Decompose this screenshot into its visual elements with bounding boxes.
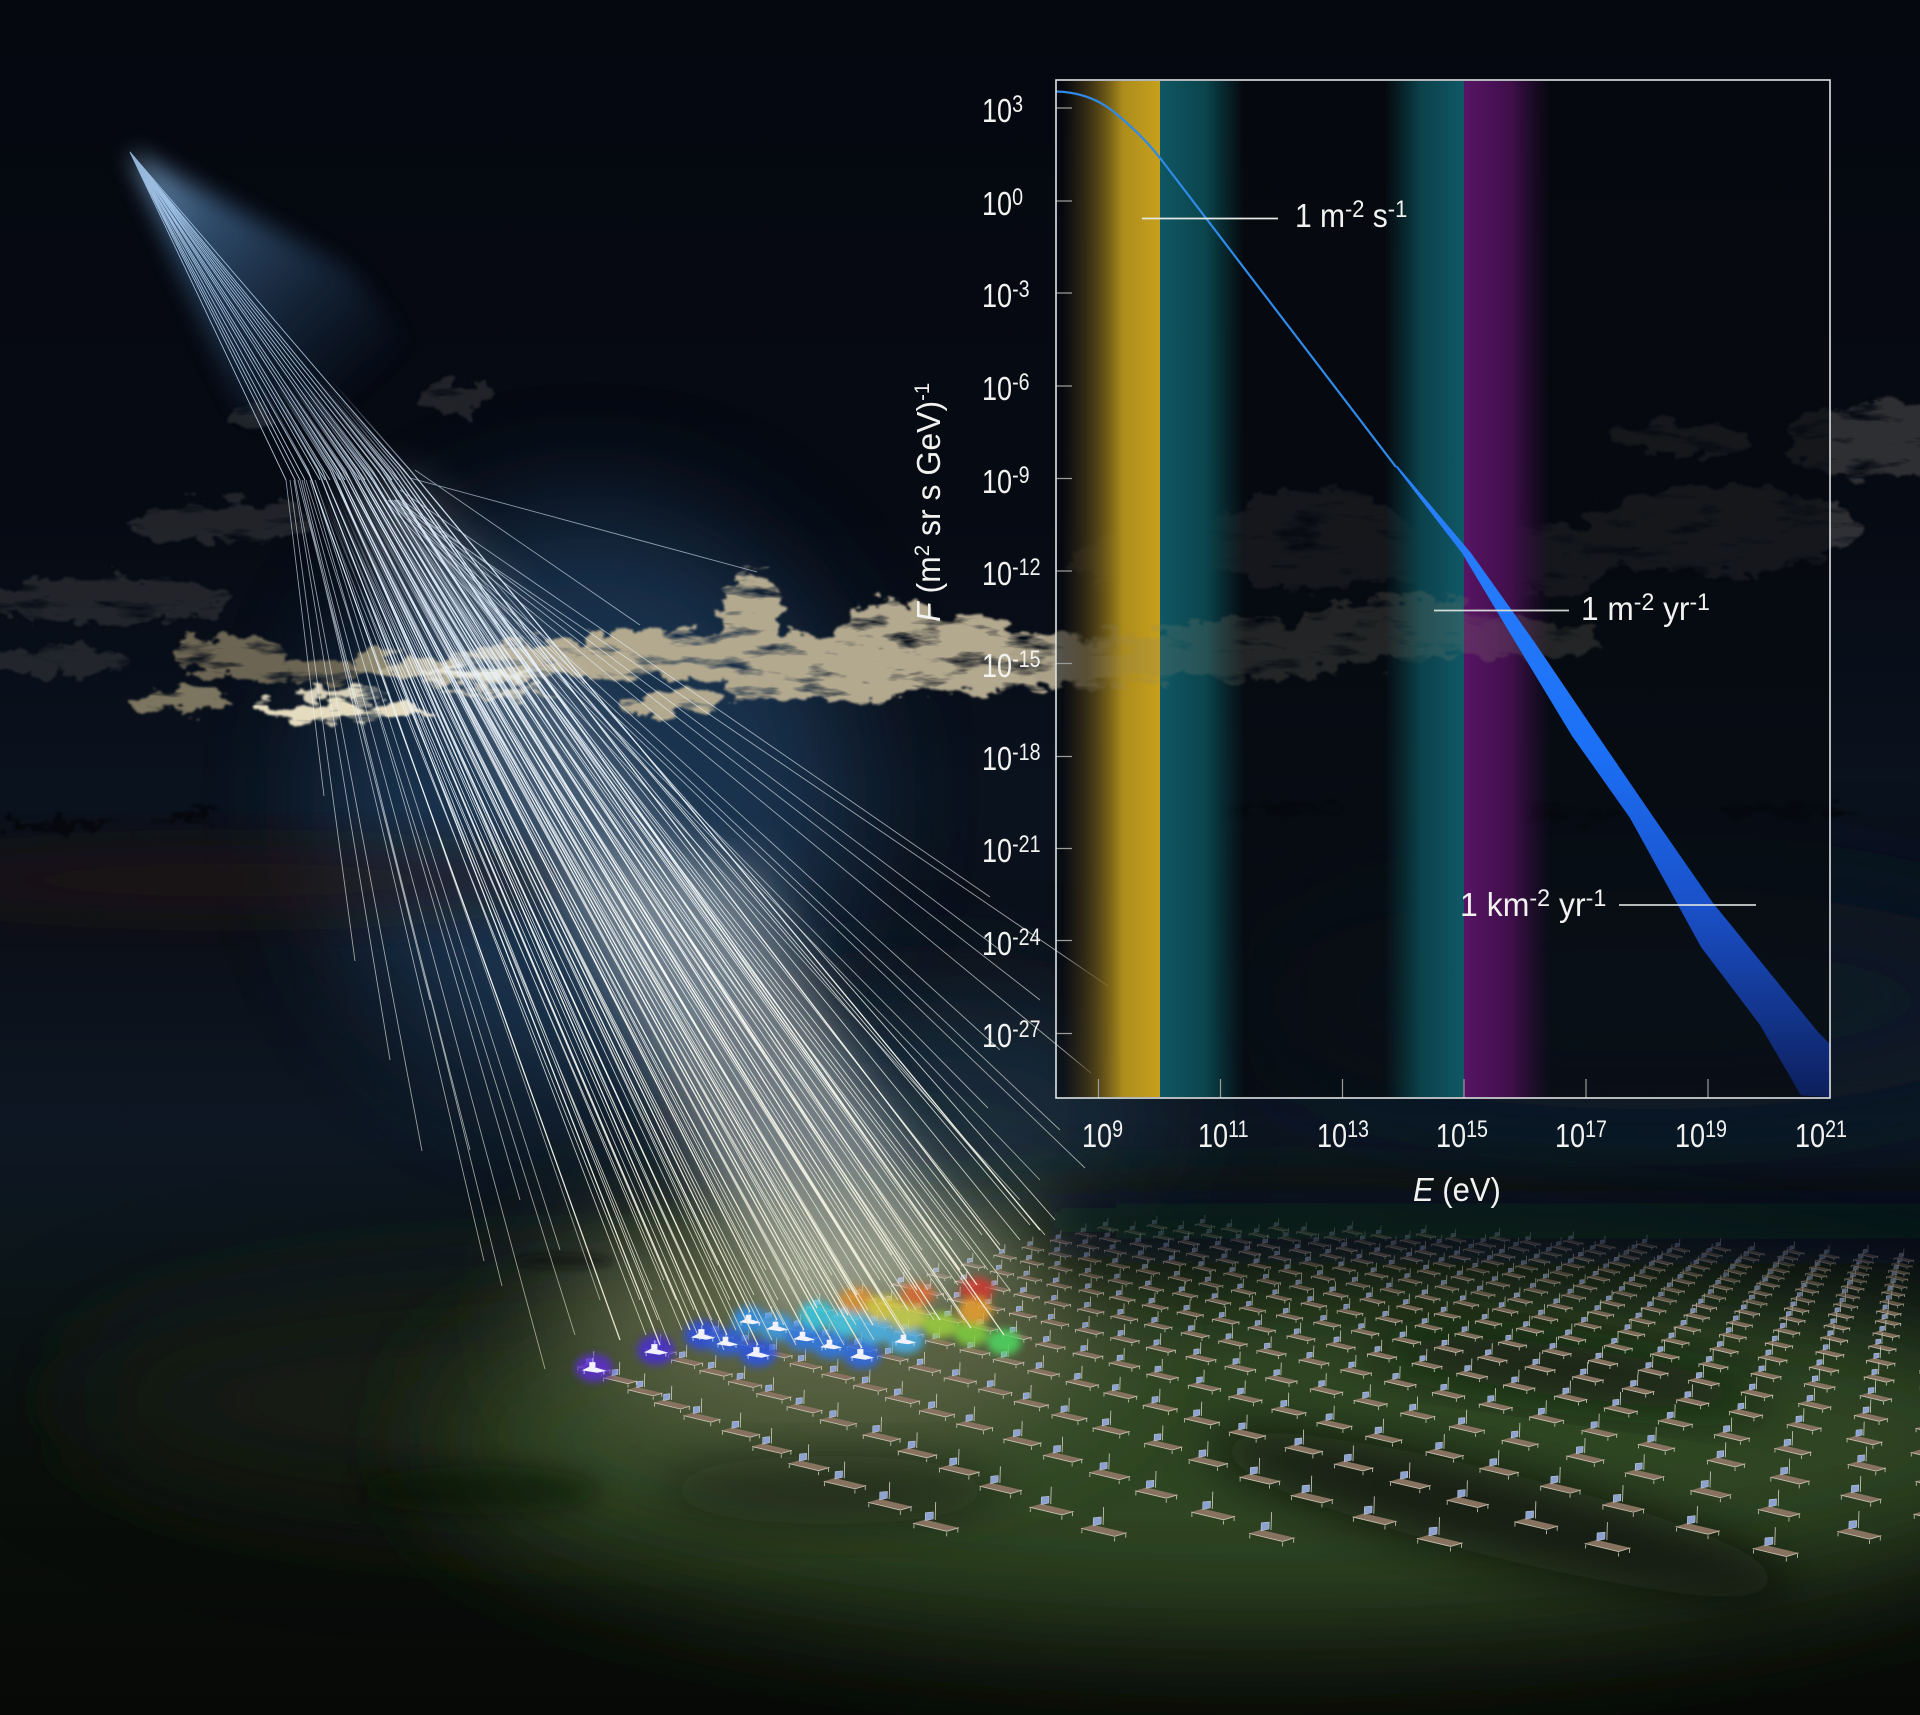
- callout: 1 per square metre per second: s: [1364, 197, 1388, 234]
- x-axis tick labels: 10: [1082, 1119, 1112, 1155]
- callout: 1 per square metre per year: [1434, 589, 1710, 627]
- y-axis title: F (m: [911, 556, 947, 622]
- y-axis tick labels: 10: [982, 187, 1012, 223]
- detector array: perspective rows of surface detectors: [577, 1214, 1920, 1602]
- chart: energy bands, flux curve and frame: [1010, 80, 1830, 1098]
- band: teal high energy: [1384, 81, 1464, 1097]
- clouds: dim distant layer: [0, 382, 1920, 829]
- y-axis tick labels: -6: [1012, 368, 1030, 395]
- x-axis tick labels: 10: [1795, 1119, 1825, 1155]
- particle shower rays: bright layer: [258, 380, 1040, 1348]
- callout: 1 per square metre per year: yr: [1654, 590, 1690, 627]
- diffuse glow of particle shower: [340, 480, 1010, 1330]
- x-axis tick labels: 9: [1112, 1115, 1123, 1142]
- band: magenta: [1464, 81, 1552, 1097]
- x-axis tick labels: 11: [1228, 1115, 1249, 1142]
- x-axis tick labels: 10: [1436, 1119, 1466, 1155]
- x-axis tick labels: [1082, 1115, 1847, 1155]
- callout: 1 per square metre per second: -1: [1388, 195, 1407, 222]
- triggered detectors: coloured hit markers: [575, 1277, 1021, 1382]
- x-axis title: E (eV): [1413, 1171, 1501, 1208]
- callout: 1 per square metre per second: -2: [1345, 195, 1364, 222]
- y-axis tick labels: 10: [982, 649, 1012, 685]
- callout: 1 per square kilometre per year: yr: [1550, 887, 1586, 923]
- x-axis tick labels: 15: [1466, 1115, 1488, 1142]
- x-axis tick labels: 17: [1585, 1115, 1607, 1142]
- axis ticks: [1056, 108, 1708, 1098]
- y-axis tick labels: -21: [1012, 830, 1041, 857]
- callout: 1 per square metre per year: -2: [1634, 589, 1654, 615]
- y-axis tick labels: 10: [982, 465, 1012, 501]
- y-axis tick labels: 10: [982, 94, 1012, 130]
- callout: 1 per square kilometre per year: -2: [1529, 886, 1550, 912]
- clouds: bright moonlit bank: [130, 572, 1200, 722]
- y-axis tick labels: 0: [1012, 183, 1023, 210]
- y-axis tick labels: 10: [982, 927, 1012, 963]
- flux band: widening uncertainty: [1395, 466, 1830, 1097]
- chart frame: [1056, 80, 1830, 1098]
- callout: 1 per square kilometre per year: [1460, 886, 1756, 923]
- y-axis title: -1: [911, 383, 934, 401]
- x-axis tick labels: 19: [1705, 1115, 1727, 1142]
- callout: 1 per square kilometre per year: 1 km: [1460, 887, 1529, 923]
- callout: 1 per square metre per second: 1 m: [1295, 197, 1345, 234]
- callout: 1 per square kilometre per year: -1: [1586, 886, 1606, 912]
- y-axis tick labels: [982, 90, 1041, 1055]
- x-axis tick labels: 10: [1675, 1119, 1705, 1155]
- callout: 1 per square metre per year: 1 m: [1581, 590, 1634, 627]
- y-axis tick labels: 10: [982, 742, 1012, 778]
- particle shower rays: thin dense layer: [316, 490, 1055, 1350]
- x-axis tick labels: 10: [1198, 1119, 1228, 1155]
- beam glow at shower origin: [130, 152, 425, 450]
- x-axis tick labels: 13: [1347, 1115, 1369, 1142]
- y-axis tick labels: 10: [982, 372, 1012, 408]
- x-axis tick labels: 10: [1555, 1119, 1585, 1155]
- y-axis tick labels: 10: [982, 557, 1012, 593]
- cloud veil over the bands: [1010, 596, 1600, 688]
- y-axis tick labels: -24: [1012, 923, 1041, 950]
- band: teal low energy: [1160, 81, 1245, 1097]
- y-axis tick labels: -27: [1012, 1015, 1041, 1042]
- x-axis tick labels: 10: [1317, 1119, 1347, 1155]
- y-axis tick labels: 10: [982, 834, 1012, 870]
- flux curve: thin section: [1056, 92, 1396, 467]
- callout: 1 per square metre per second: [1142, 195, 1407, 234]
- ground: green field with light pool: [60, 1200, 1920, 1630]
- y-axis tick labels: 10: [982, 1019, 1012, 1055]
- particle shower rays: stray outliers: [286, 470, 1108, 1369]
- y-axis tick labels: -3: [1012, 275, 1030, 302]
- y-axis tick labels: -12: [1012, 553, 1041, 580]
- callout: 1 per square metre per year: -1: [1689, 589, 1710, 615]
- band: yellow: [1062, 81, 1160, 1097]
- y-axis tick labels: -15: [1012, 645, 1041, 672]
- y-axis tick labels: 3: [1012, 90, 1023, 117]
- y-axis tick labels: 10: [982, 279, 1012, 315]
- particle shower: trunk lines from primary interaction: [130, 152, 410, 480]
- y-axis title: sr s GeV): [911, 401, 947, 545]
- x-axis tick labels: 21: [1825, 1115, 1847, 1142]
- haze dimming the far edge of the array: [1050, 1170, 1920, 1340]
- y-axis tick labels: -9: [1012, 461, 1030, 488]
- y-axis tick labels: -18: [1012, 738, 1041, 765]
- chart panel backing: [1056, 80, 1830, 1098]
- y-axis title: 2: [911, 545, 934, 556]
